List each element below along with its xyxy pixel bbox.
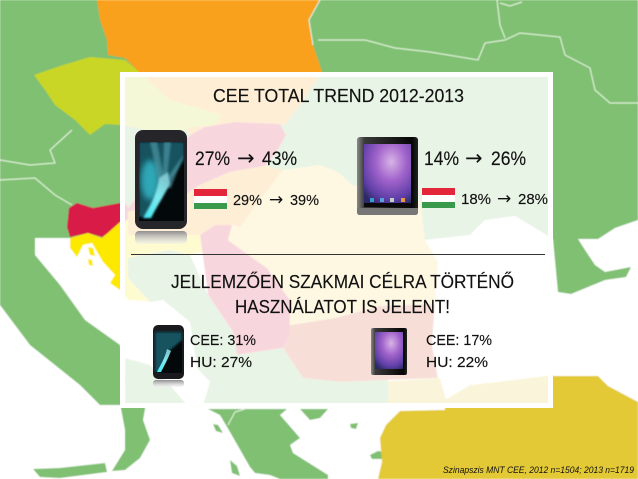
map: Crimea — [553, 239, 631, 294]
map: Sicily — [33, 463, 107, 478]
stat: Hungary smartphone trend: 29% — [233, 192, 262, 209]
map: Poland — [97, 0, 322, 135]
heading: professional use — [171, 271, 514, 317]
map: Czech Republic — [34, 57, 222, 135]
stat: CEE tablet trend: → — [465, 146, 483, 170]
icon: small tablet — [371, 328, 407, 375]
icon: Hungarian flag (smartphone) — [194, 189, 227, 209]
map: Romania — [228, 165, 438, 325]
map: Hungary — [125, 166, 283, 235]
map: Slovakia — [125, 122, 286, 212]
icon: smartphone — [135, 130, 187, 244]
stat: CEE tablet trend — [424, 146, 526, 170]
panel: translucent content panel — [122, 74, 550, 406]
map: Greek islands — [213, 409, 384, 476]
map: Slovenia — [67, 203, 128, 237]
map: European Turkey strip — [388, 375, 553, 405]
stat: Hungary smartphone trend: 39% — [290, 192, 319, 209]
stat: CEE smartphone trend — [195, 146, 297, 170]
icon: tablet — [357, 137, 418, 215]
title: CEE TOTAL TREND 2012-2013 — [213, 86, 464, 106]
map: Turkey — [378, 376, 638, 479]
stat: smartphone professional use — [190, 332, 256, 371]
stat: Hungary tablet trend: 28% — [518, 191, 548, 208]
map: Greece — [208, 409, 328, 479]
icon: small smartphone — [153, 325, 184, 387]
heading: professional use: JELLEMZŐEN SZAKMAI CÉLRA TÖRTÉNŐ — [171, 271, 514, 292]
stat: tablet professional use — [426, 332, 492, 371]
stat: Hungary tablet trend — [461, 189, 548, 209]
stat: tablet professional use: HU: 22% — [426, 354, 488, 371]
stat: smartphone professional use: CEE: 31% — [190, 332, 256, 349]
map: Calabria toe — [112, 403, 150, 471]
stat: CEE tablet trend: 14% — [424, 149, 459, 170]
stat: CEE smartphone trend: 43% — [262, 149, 297, 170]
map: Bulgaria — [283, 304, 438, 382]
stat: tablet professional use: CEE: 17% — [426, 332, 492, 349]
stat: Hungary tablet trend: → — [497, 189, 511, 209]
icon: Hungarian flag (tablet) — [422, 188, 455, 208]
stat: Hungary smartphone trend — [233, 190, 319, 210]
stat: Hungary smartphone trend: → — [269, 190, 283, 210]
stat: Hungary tablet trend: 18% — [461, 191, 491, 208]
map: Serbia — [200, 225, 290, 355]
stat: CEE smartphone trend: → — [237, 146, 255, 170]
stat: CEE smartphone trend: 27% — [195, 149, 230, 170]
map: Italian heel — [125, 358, 187, 405]
map: Croatia — [70, 220, 205, 302]
heading: professional use: HASZNÁLATOT IS JELENT! — [235, 297, 450, 317]
stat: CEE tablet trend: 26% — [491, 149, 526, 170]
map: Balkan green land — [128, 250, 388, 405]
stat: smartphone professional use: HU: 27% — [190, 354, 252, 371]
map: Croatian islands — [88, 247, 95, 266]
